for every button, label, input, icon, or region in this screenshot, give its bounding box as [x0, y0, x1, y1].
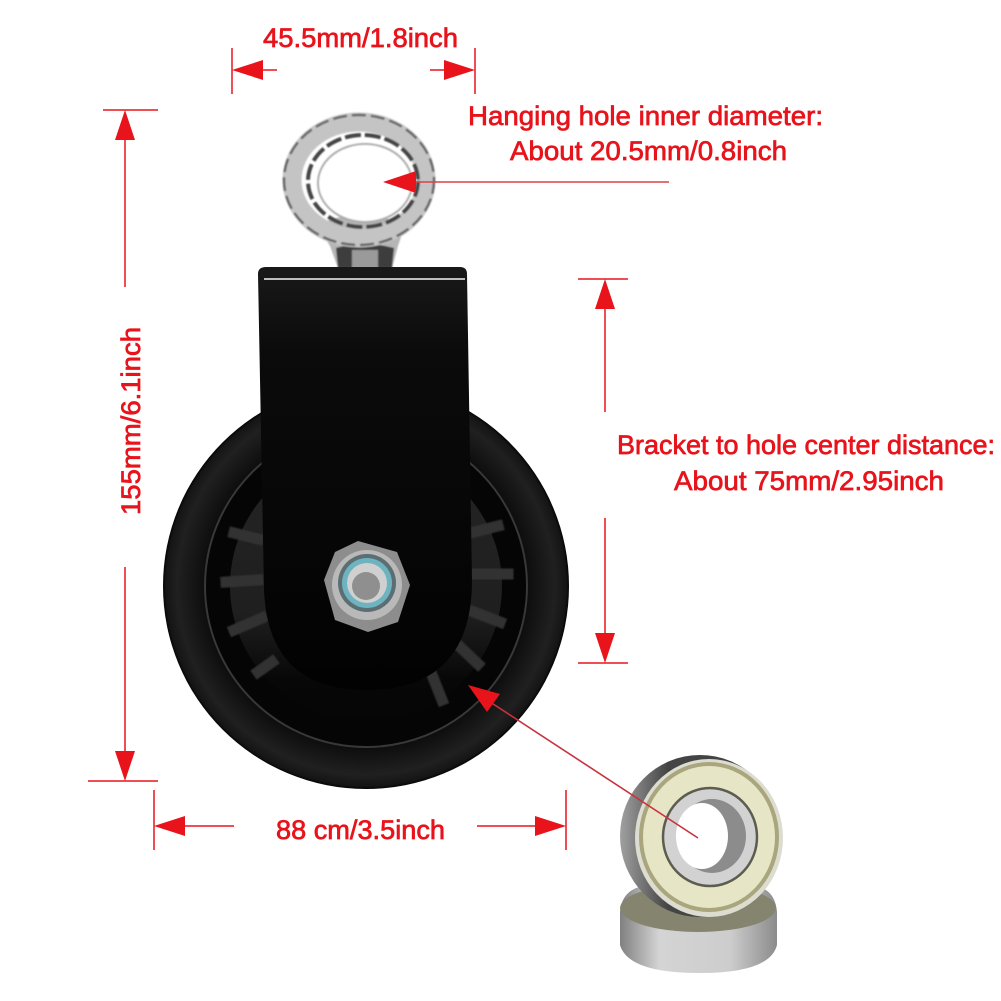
callout: hanging hole diameter: About 20.5mm/0.8inch: [510, 136, 787, 166]
icon: pulley wheel: [163, 383, 569, 789]
icon: bearings: [620, 755, 783, 973]
dimension: bracket to hole distance: [578, 279, 995, 663]
dimension: width of eye bolt: [232, 23, 475, 94]
icon: eye bolt: [284, 115, 434, 268]
dimension: bracket to hole distance: About 75mm/2.95inch: [674, 466, 944, 496]
callout: hanging hole diameter: [383, 101, 823, 193]
dimension: wheel diameter: 88 cm/3.5inch: [276, 815, 445, 845]
dimension: wheel diameter: [154, 790, 566, 850]
callout: hanging hole diameter: Hanging hole inner diameter:: [468, 101, 823, 131]
icon: axle nut: [324, 541, 410, 632]
dimension: width of eye bolt: 45.5mm/1.8inch: [263, 23, 458, 53]
icon: bracket: [258, 267, 472, 690]
dimension: total height: [88, 110, 158, 781]
dimension: bracket to hole distance: Bracket to hole center distance:: [617, 430, 995, 460]
dimension: total height: 155mm/6.1inch: [116, 327, 146, 515]
arrow: bearing location: [468, 685, 698, 838]
